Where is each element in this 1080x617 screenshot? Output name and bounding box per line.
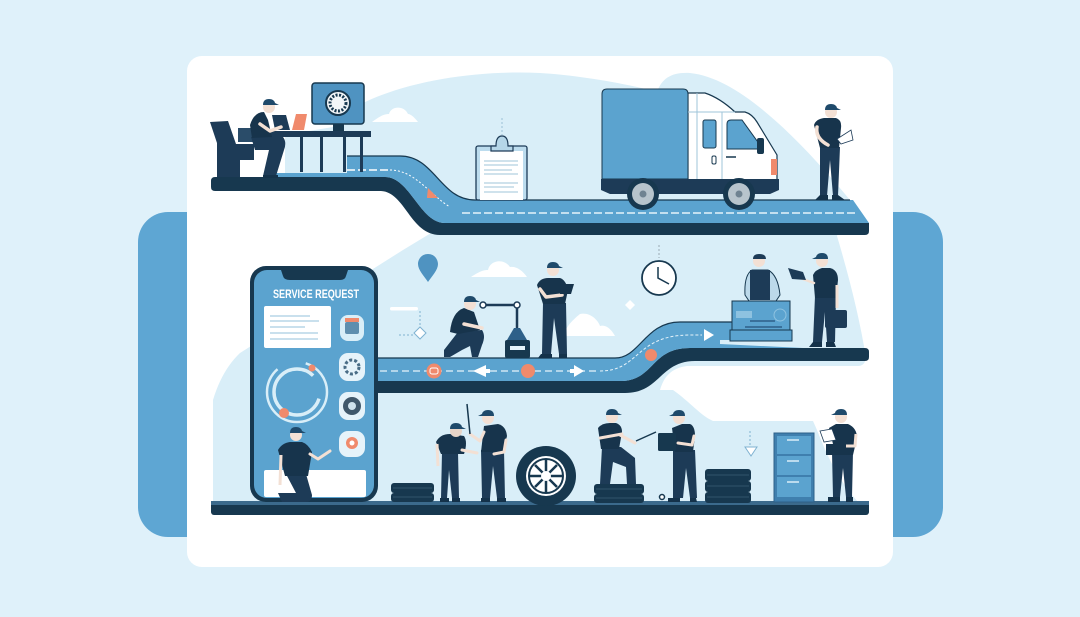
- road 1 top outline: [347, 156, 850, 200]
- road 1 dashes: [347, 169, 390, 171]
- road 1 route dots: [390, 170, 450, 207]
- light blue background blob: [213, 72, 866, 515]
- standing mechanic with tablet: [537, 262, 574, 358]
- road 2 top outline: [378, 322, 732, 358]
- mirror handles and tail light: [757, 138, 764, 154]
- middle cloud: [471, 261, 527, 277]
- phone screen: [254, 270, 374, 498]
- console: [732, 301, 790, 330]
- kneeling worker at phone: [278, 427, 330, 502]
- diamond marker: [399, 311, 426, 339]
- phone notch: [281, 270, 348, 280]
- worker with clipboard by truck: [814, 104, 853, 200]
- front wheel: [723, 178, 755, 210]
- delivery truck: [601, 89, 779, 210]
- downward triangle marker: [745, 431, 757, 456]
- truck chassis: [601, 179, 779, 194]
- small white diamond: [625, 300, 635, 310]
- rear wheel: [627, 178, 659, 210]
- kneeling mechanic: [444, 296, 484, 357]
- phone bottom panel: [264, 470, 366, 497]
- truck cab: [688, 93, 777, 180]
- request form card: [264, 306, 331, 348]
- road 2 blue surface: [378, 322, 803, 381]
- road 2 dashes: [380, 370, 600, 372]
- laptops: [272, 115, 290, 130]
- road 3 shelf: [211, 501, 869, 515]
- smartphone: [250, 266, 378, 502]
- road 1 blue surface: [270, 156, 869, 223]
- desk: [271, 131, 371, 172]
- machine console and worker: [730, 254, 792, 341]
- location pin: [418, 254, 438, 282]
- road 1 arrow marker: [427, 188, 438, 198]
- first tire stack: [391, 483, 434, 502]
- top cloud: [372, 108, 418, 122]
- phone body: [250, 266, 378, 502]
- desk worker scene: [210, 83, 371, 178]
- road 2: [378, 322, 869, 393]
- road 2 curve dots: [600, 335, 702, 371]
- monitor with tire icon: [312, 83, 364, 131]
- hydraulic jack: [480, 302, 530, 358]
- worker with clipboard by cabinet: [820, 409, 857, 502]
- kneeling mechanic and jack: [444, 296, 530, 358]
- filing cabinet: [774, 433, 814, 502]
- worker behind console: [745, 254, 780, 301]
- chair side table: [238, 128, 256, 142]
- road 1 dark edge: [211, 177, 869, 235]
- right blue side panel: [853, 212, 943, 537]
- mechanic with battery: [658, 410, 697, 502]
- truck cargo box: [602, 89, 688, 179]
- small ring marker: [660, 494, 664, 500]
- circular process arrows: [267, 362, 327, 422]
- road 2 orange markers: [426, 349, 657, 378]
- road 2 dark edge: [378, 348, 869, 393]
- second tire stack: [705, 469, 751, 503]
- cab windows: [703, 120, 716, 148]
- phone heading: SERVICE REQUEST: [273, 289, 359, 301]
- road 1: [211, 156, 869, 235]
- app icons: [339, 315, 365, 457]
- road 2 direction arrows: [473, 329, 714, 377]
- clipboard: [476, 118, 527, 200]
- road 1 lane dashes: [462, 212, 855, 214]
- worker with tablet and briefcase: [788, 253, 847, 347]
- lower middle cloud: [563, 314, 615, 336]
- seated worker: [250, 99, 285, 178]
- large wheel: [516, 446, 576, 506]
- white card: [187, 56, 893, 567]
- clock: [642, 245, 676, 295]
- left blue side panel: [138, 212, 228, 537]
- mechanic stepping on tires: [598, 409, 656, 484]
- cab door lines: [688, 93, 735, 180]
- small white label bar: [390, 307, 418, 310]
- bending mechanic: [436, 423, 477, 502]
- tire stack under standing worker: [594, 484, 644, 503]
- chair: [210, 121, 254, 177]
- mechanic with rod: [467, 404, 507, 502]
